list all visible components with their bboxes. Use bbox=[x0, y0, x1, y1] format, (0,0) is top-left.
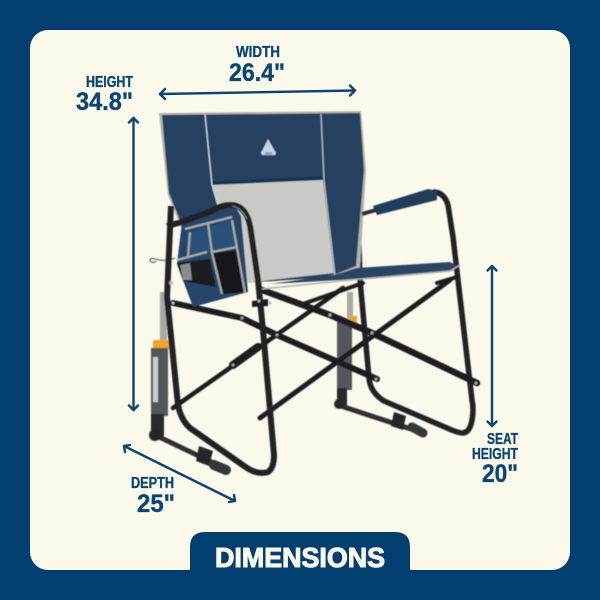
label: seat height: HEIGHT bbox=[472, 446, 518, 463]
right armrest pad bbox=[373, 189, 437, 215]
label: width bbox=[229, 44, 285, 87]
armrest connector bbox=[362, 210, 376, 214]
arrow: depth bbox=[124, 445, 235, 502]
label: seat height: SEAT bbox=[487, 431, 518, 448]
label: seat height: 20" bbox=[482, 460, 518, 488]
tab: dimensions bbox=[190, 532, 410, 573]
label: height: HEIGHT bbox=[86, 74, 133, 91]
arrow: height bbox=[129, 118, 138, 410]
side pocket bbox=[150, 203, 248, 307]
rear right post and rocker bbox=[358, 192, 473, 433]
label: height: 34.8" bbox=[76, 88, 133, 116]
arrow: seat height bbox=[488, 266, 496, 426]
navy back bbox=[162, 113, 364, 283]
frame clamp bbox=[252, 299, 268, 307]
frame rivets bbox=[169, 281, 272, 304]
grey back edging bbox=[159, 111, 366, 282]
brace rivets bbox=[180, 313, 478, 418]
label: seat height bbox=[472, 431, 518, 488]
logo bbox=[261, 139, 276, 155]
chair back and seat fabric bbox=[159, 111, 460, 289]
label: width: 26.4" bbox=[229, 59, 285, 87]
chair illustration bbox=[149, 111, 478, 473]
dark band seam bbox=[212, 178, 323, 183]
left frame bbox=[167, 205, 274, 473]
label: depth: DEPTH bbox=[131, 475, 174, 492]
cross braces bbox=[173, 277, 477, 418]
label: depth bbox=[131, 475, 175, 518]
seat bbox=[270, 262, 459, 284]
chair back and seat fabric: GCI bbox=[265, 150, 272, 156]
arrow: width bbox=[160, 86, 355, 99]
label: height bbox=[76, 74, 133, 116]
grey mesh panel bbox=[212, 180, 334, 283]
seat edge bbox=[262, 265, 460, 289]
right shock absorber bbox=[334, 292, 423, 433]
white piping right bbox=[321, 114, 335, 275]
label: width: WIDTH bbox=[236, 44, 280, 61]
label: depth: 25" bbox=[137, 490, 175, 518]
white piping left bbox=[205, 114, 218, 205]
tab: dimensions: DIMENSIONS bbox=[215, 542, 385, 573]
left frame highlight bbox=[232, 206, 247, 219]
left shock absorber bbox=[149, 292, 226, 470]
